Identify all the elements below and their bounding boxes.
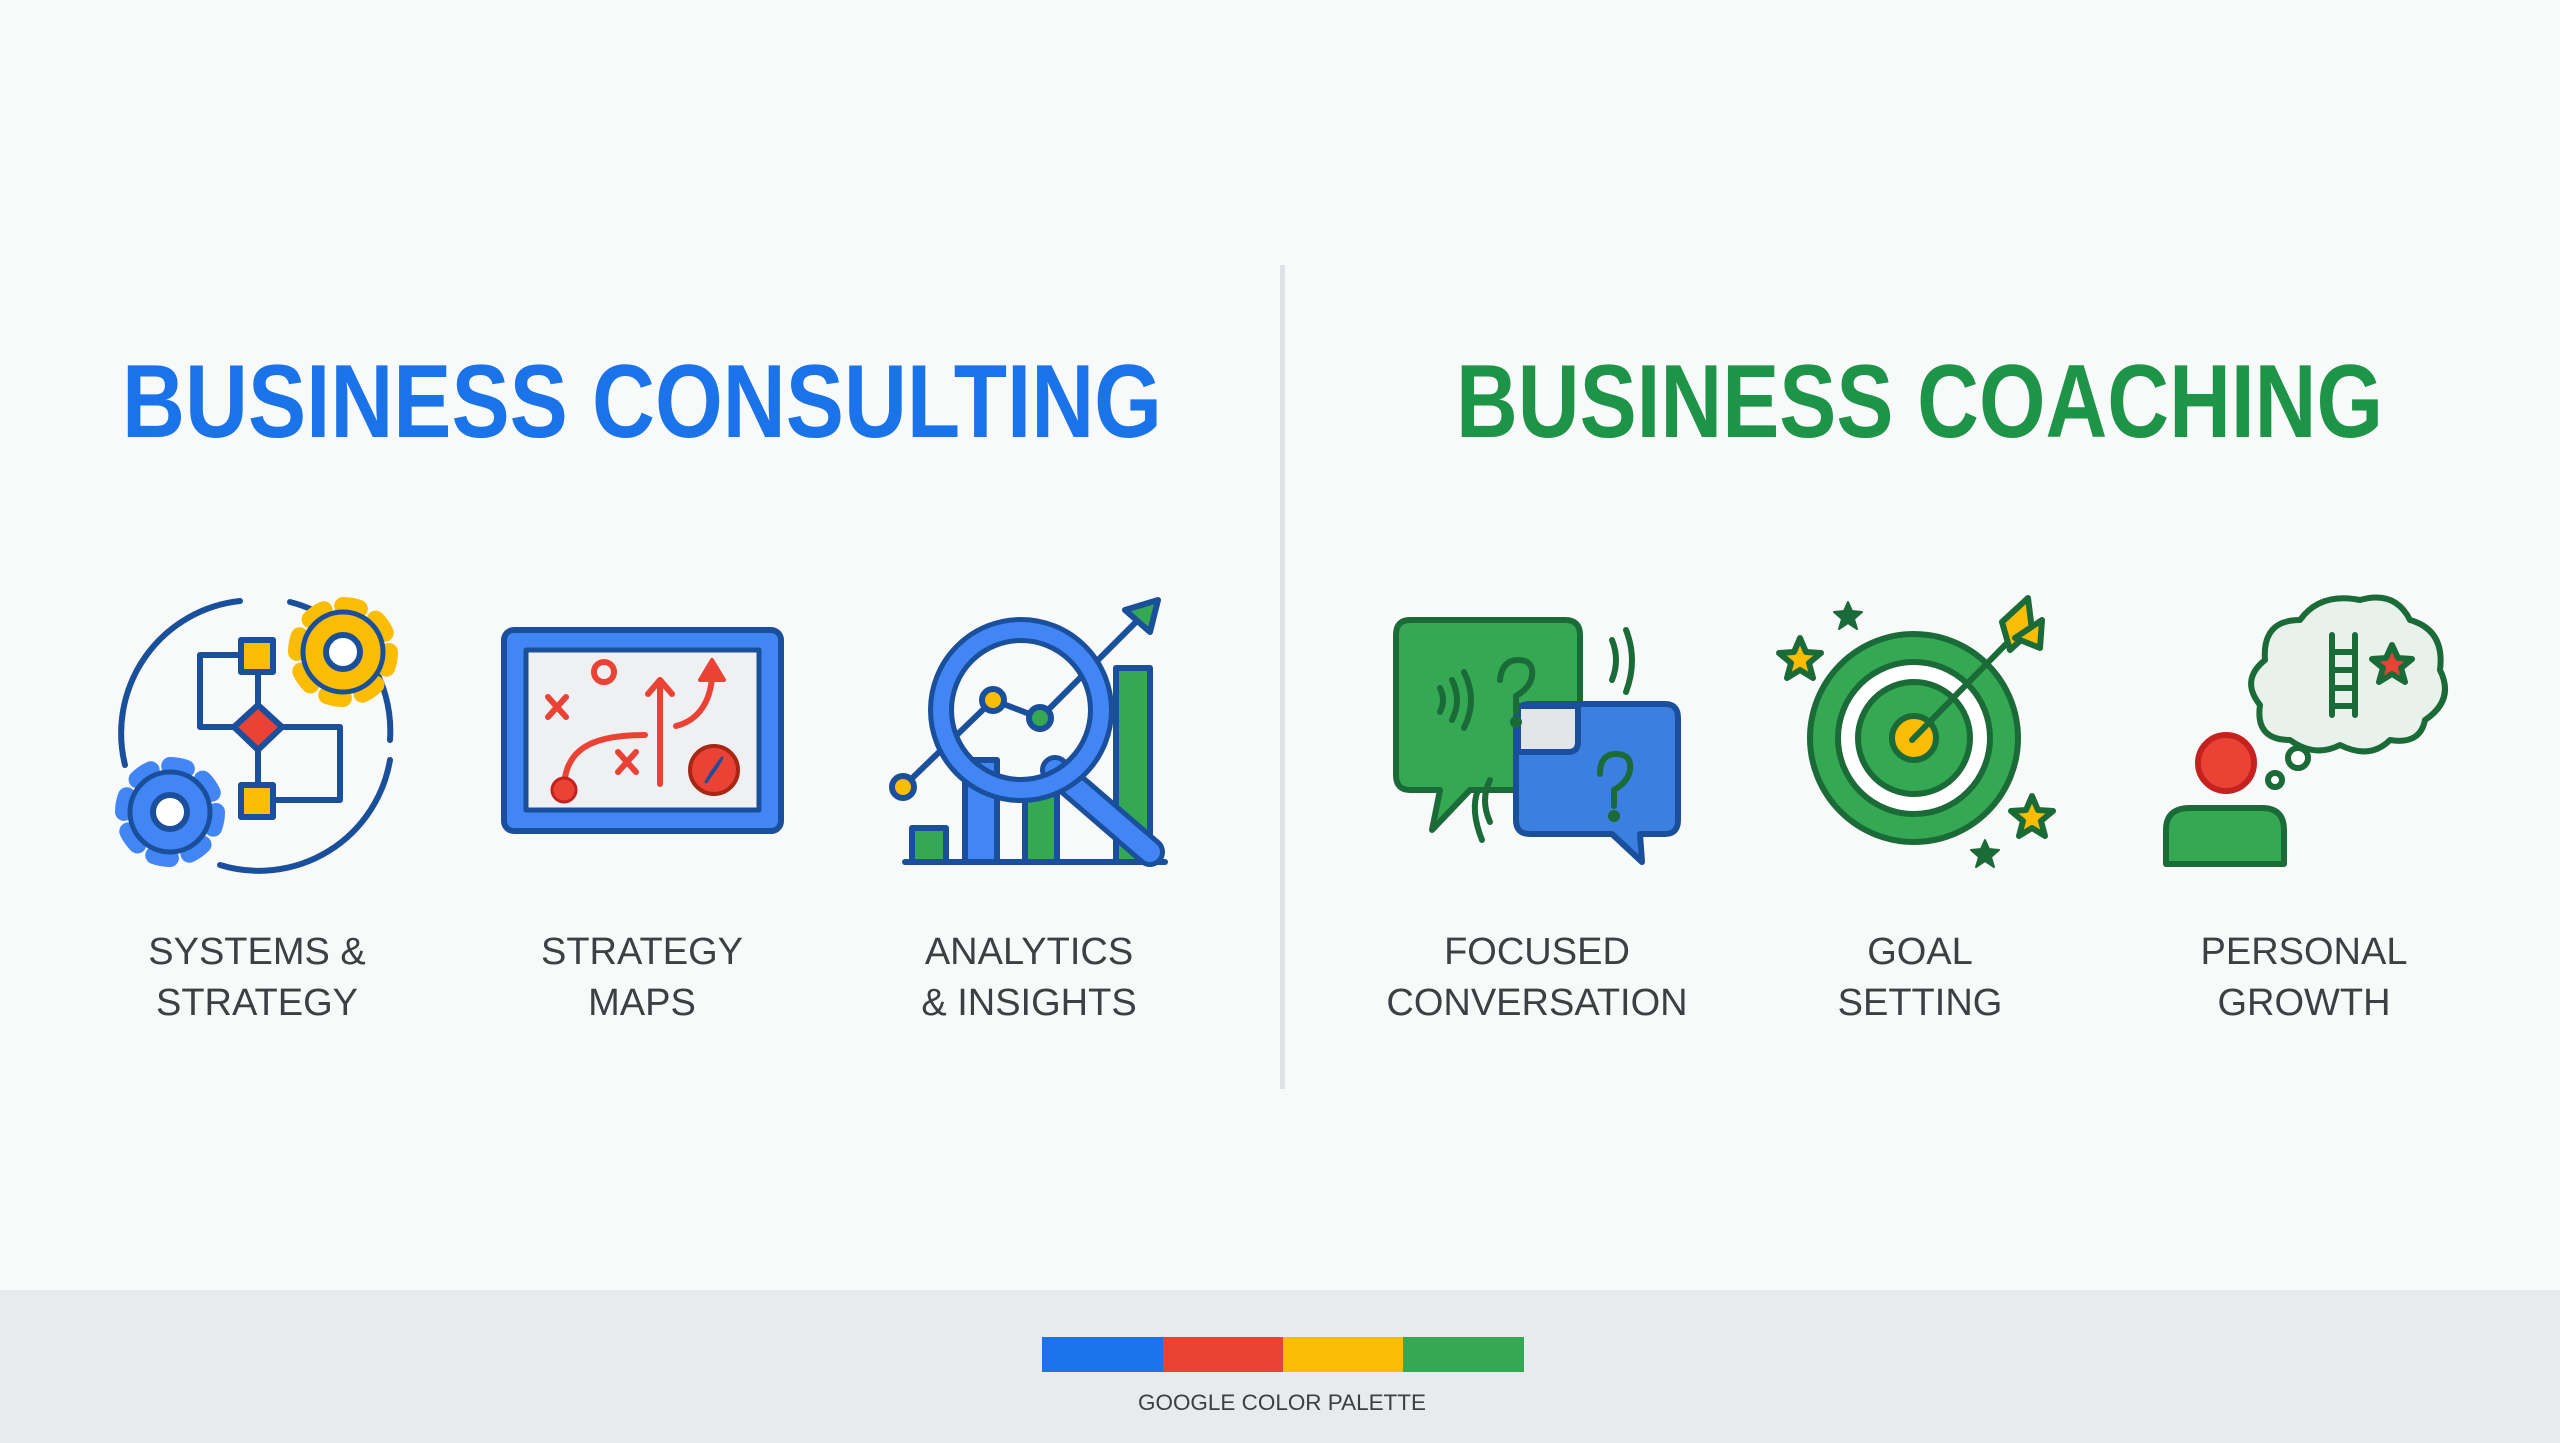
color palette bar xyxy=(1042,1337,1524,1372)
label: analytics & insights: & INSIGHTS xyxy=(921,982,1137,1024)
label: goal setting: GOAL xyxy=(1867,931,1973,973)
label: strategy maps: STRATEGY xyxy=(541,931,743,973)
icon: goal setting xyxy=(1779,598,2053,867)
icon: systems & strategy xyxy=(121,601,390,871)
divider xyxy=(1280,265,1285,1089)
label: goal setting: SETTING xyxy=(1838,982,2002,1024)
label: systems & strategy: SYSTEMS & xyxy=(148,931,366,973)
icon: focused conversation xyxy=(1396,620,1678,862)
label: focused conversation: FOCUSED xyxy=(1444,931,1630,973)
icon: personal growth xyxy=(2166,598,2445,864)
label: systems & strategy: STRATEGY xyxy=(156,982,358,1024)
label: personal growth: GROWTH xyxy=(2217,982,2391,1024)
label: strategy maps: MAPS xyxy=(588,982,696,1024)
title: business consulting: BUSINESS CONSULTING xyxy=(122,344,1162,460)
icon: analytics & insights xyxy=(892,600,1165,862)
labels xyxy=(148,931,2407,1024)
label: personal growth: PERSONAL xyxy=(2201,931,2407,973)
footer caption: GOOGLE COLOR PALETTE xyxy=(1138,1390,1426,1415)
footer band xyxy=(0,1290,2560,1443)
label: analytics & insights: ANALYTICS xyxy=(925,931,1133,973)
label: focused conversation: CONVERSATION xyxy=(1386,982,1688,1024)
icon: strategy maps xyxy=(504,630,781,831)
title: business coaching: BUSINESS COACHING xyxy=(1456,344,2383,460)
